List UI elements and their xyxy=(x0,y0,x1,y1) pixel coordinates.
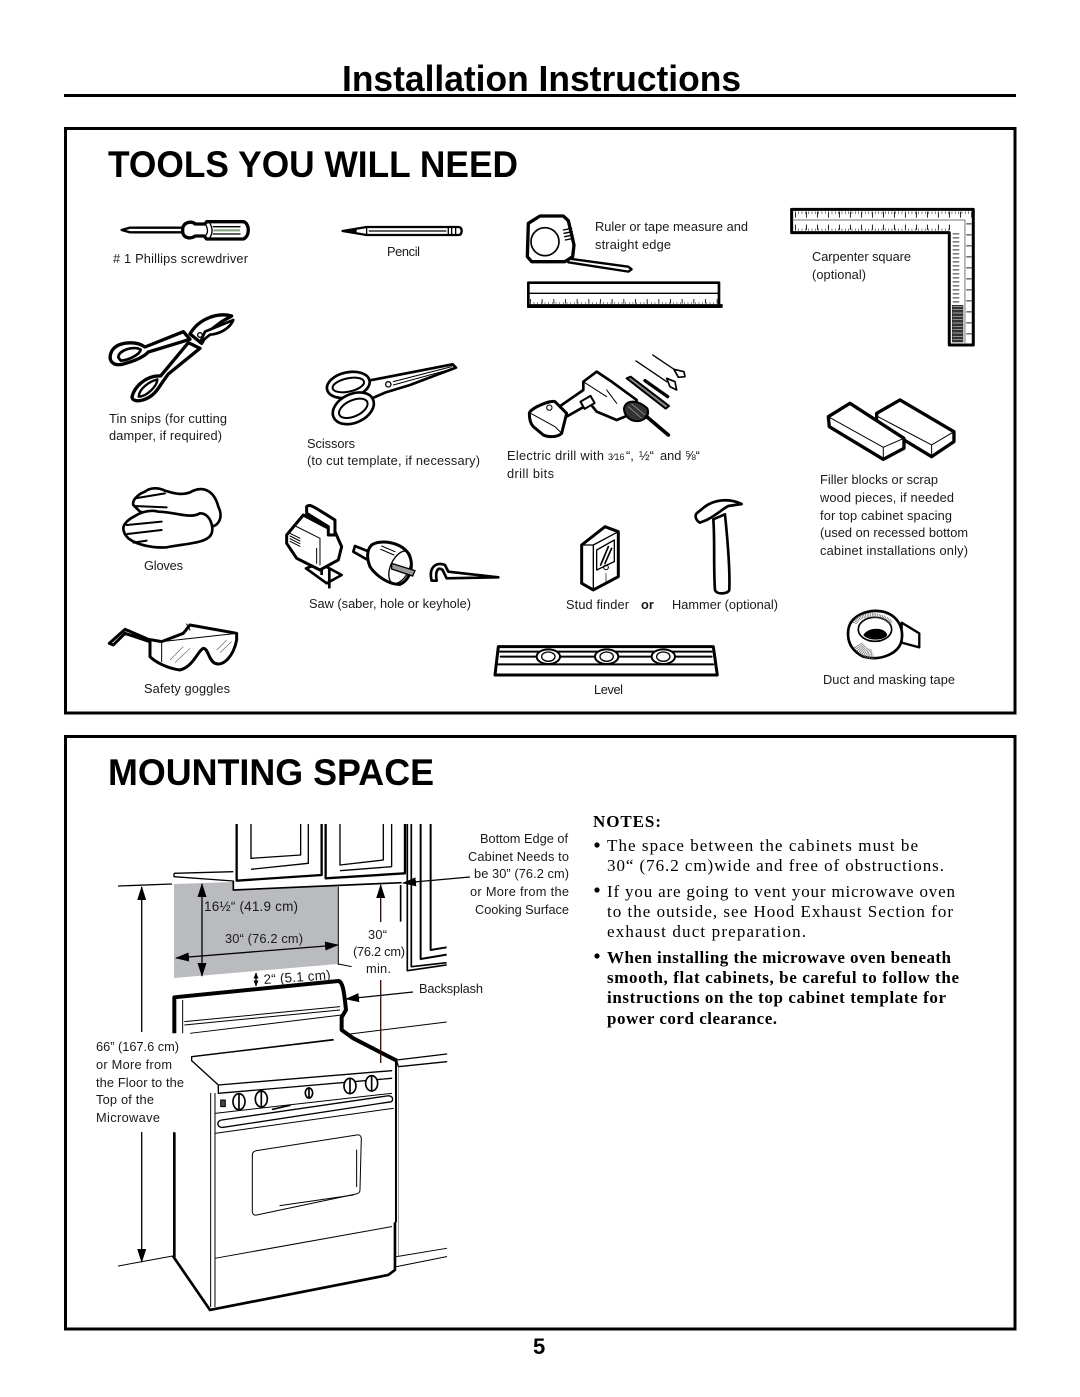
icon: keyhole saw xyxy=(431,564,498,581)
label: 66 inch height: 66” (167.6 cm) xyxy=(96,1039,179,1054)
label: 30 inch minimum clearance: min. xyxy=(366,961,391,976)
label: filler blocks: for top cabinet spacing xyxy=(820,508,952,523)
icon: saber saw xyxy=(287,505,342,588)
label: scissors: Scissors xyxy=(307,436,355,451)
label: backsplash: Backsplash xyxy=(419,981,483,996)
labels: microwave dimensions: 30“ (76.2 cm) xyxy=(225,931,303,946)
icon: safety goggles xyxy=(109,624,237,670)
label: electric drill xyxy=(507,448,700,481)
icon: electric drill xyxy=(529,355,685,437)
label: ruler or tape measure: straight edge xyxy=(595,237,671,252)
icon: gloves xyxy=(123,488,221,548)
label: screwdriver: # 1 Phillips screwdriver xyxy=(113,251,249,266)
label: bottom edge of cabinet: Cooking Surface xyxy=(475,902,569,917)
label: filler blocks: cabinet installations only) xyxy=(820,543,968,558)
label: 66 inch height: the Floor to the xyxy=(96,1075,184,1090)
notes text block: exhaust duct preparation. xyxy=(607,922,806,941)
notes text block: NOTES: xyxy=(593,812,661,831)
label: ruler or tape measure: Ruler or tape measure and xyxy=(595,219,748,234)
range upper section and backsplash xyxy=(174,981,447,1061)
label: carpenter square: Carpenter square xyxy=(812,249,911,264)
icon: screwdriver xyxy=(122,222,248,239)
notes text block: When installing the microwave oven beneath xyxy=(607,948,952,967)
grey microwave space xyxy=(174,882,338,978)
icon: filler blocks xyxy=(828,400,954,459)
label: ruler or tape measure xyxy=(595,219,748,252)
icon: straight edge ruler xyxy=(527,283,723,307)
label: filler blocks xyxy=(819,472,968,558)
label: 30 inch minimum clearance: (76.2 cm) xyxy=(353,944,405,959)
label: filler blocks: (used on recessed bottom xyxy=(820,525,968,540)
label: carpenter square xyxy=(812,249,911,282)
dimension arrows xyxy=(118,877,470,1262)
label: scissors xyxy=(307,436,480,468)
label: tin snips xyxy=(109,411,227,443)
label: filler blocks: wood pieces, if needed xyxy=(819,490,954,505)
label: electric drill: drill bits xyxy=(507,466,554,481)
label: safety goggles: Safety goggles xyxy=(144,681,230,696)
notes text block: If you are going to vent your microwave oven xyxy=(607,882,956,901)
label: duct tape: Duct and masking tape xyxy=(823,672,955,687)
label: 66 inch height: Top of the xyxy=(96,1092,154,1107)
label: 66 inch height: Microwave xyxy=(96,1110,160,1125)
icon: pencil xyxy=(343,227,462,235)
notes text block xyxy=(593,812,959,1028)
label: bottom edge of cabinet: be 30” (76.2 cm) xyxy=(474,866,569,881)
labels: microwave dimensions: 2“ (5.1 cm) xyxy=(263,967,331,987)
labels: microwave dimensions xyxy=(204,899,331,987)
notes text block: smooth, flat cabinets, be careful to follow the xyxy=(607,968,959,987)
label: electric drill: ½“ xyxy=(639,448,654,463)
label: electric drill: Electric drill with xyxy=(507,448,604,463)
label: saw: Saw (saber, hole or keyhole) xyxy=(309,596,471,611)
label: electric drill: and xyxy=(660,448,681,463)
label: stud finder or hammer: Hammer (optional) xyxy=(672,597,778,612)
icon: stud finder xyxy=(582,527,618,590)
notes text block: The space between the cabinets must be xyxy=(607,836,918,855)
icon: level xyxy=(495,647,717,675)
icon: duct tape roll xyxy=(848,611,919,658)
notes text block: to the outside, see Hood Exhaust Section for xyxy=(607,902,953,921)
label: 66 inch height: or More from xyxy=(96,1057,172,1072)
label: electric drill: 3⁄16 xyxy=(608,452,625,462)
label: gloves: Gloves xyxy=(144,558,183,573)
label: 30 inch minimum clearance xyxy=(353,927,405,976)
icon: tin snips xyxy=(110,315,233,401)
label: stud finder or hammer: or xyxy=(641,597,654,612)
label: bottom edge of cabinet: Bottom Edge of xyxy=(480,831,568,846)
label: bottom edge of cabinet: Cabinet Needs to xyxy=(468,849,569,864)
diagram: range and cabinets xyxy=(118,824,470,1310)
label: filler blocks: Filler blocks or scrap xyxy=(820,472,938,487)
notes text block: power cord clearance. xyxy=(607,1009,777,1028)
label: carpenter square: (optional) xyxy=(812,267,866,282)
label: level: Level xyxy=(594,682,623,697)
icon: hammer xyxy=(696,500,742,593)
label: pencil: Pencil xyxy=(387,244,420,259)
label: electric drill: “, xyxy=(626,448,634,463)
icon: hole saw xyxy=(353,542,416,587)
label: stud finder or hammer xyxy=(566,597,778,612)
icon: tape measure xyxy=(527,216,632,272)
label: tin snips: Tin snips (for cutting xyxy=(109,411,227,426)
page number: 5 xyxy=(533,1334,545,1359)
label: electric drill: ⅝“ xyxy=(685,448,700,463)
icon: scissors xyxy=(324,364,456,430)
label: bottom edge of cabinet xyxy=(468,831,569,917)
panel: tools you will need xyxy=(66,128,1015,713)
heading: mounting space: MOUNTING SPACE xyxy=(108,752,434,793)
upper cabinets xyxy=(174,824,447,971)
icon: carpenter square xyxy=(792,209,973,345)
label: bottom edge of cabinet: or More from the xyxy=(470,884,569,899)
notes text block: instructions on the top cabinet template for xyxy=(607,988,946,1007)
label: stud finder or hammer: Stud finder xyxy=(566,597,630,612)
heading: tools you will need: TOOLS YOU WILL NEED xyxy=(108,144,518,185)
range body xyxy=(118,1040,447,1310)
notes text block: 30“ (76.2 cm)wide and free of obstructions. xyxy=(607,856,944,875)
label: 30 inch minimum clearance: 30“ xyxy=(368,927,387,942)
panel: mounting space xyxy=(66,736,1015,1329)
label: scissors: (to cut template, if necessary) xyxy=(307,453,480,468)
labels: microwave dimensions: 16½“ (41.9 cm) xyxy=(204,899,298,914)
label: tin snips: damper, if required) xyxy=(109,428,222,443)
title: Installation Instructions xyxy=(342,58,741,99)
label: 66 inch height xyxy=(96,1039,184,1125)
